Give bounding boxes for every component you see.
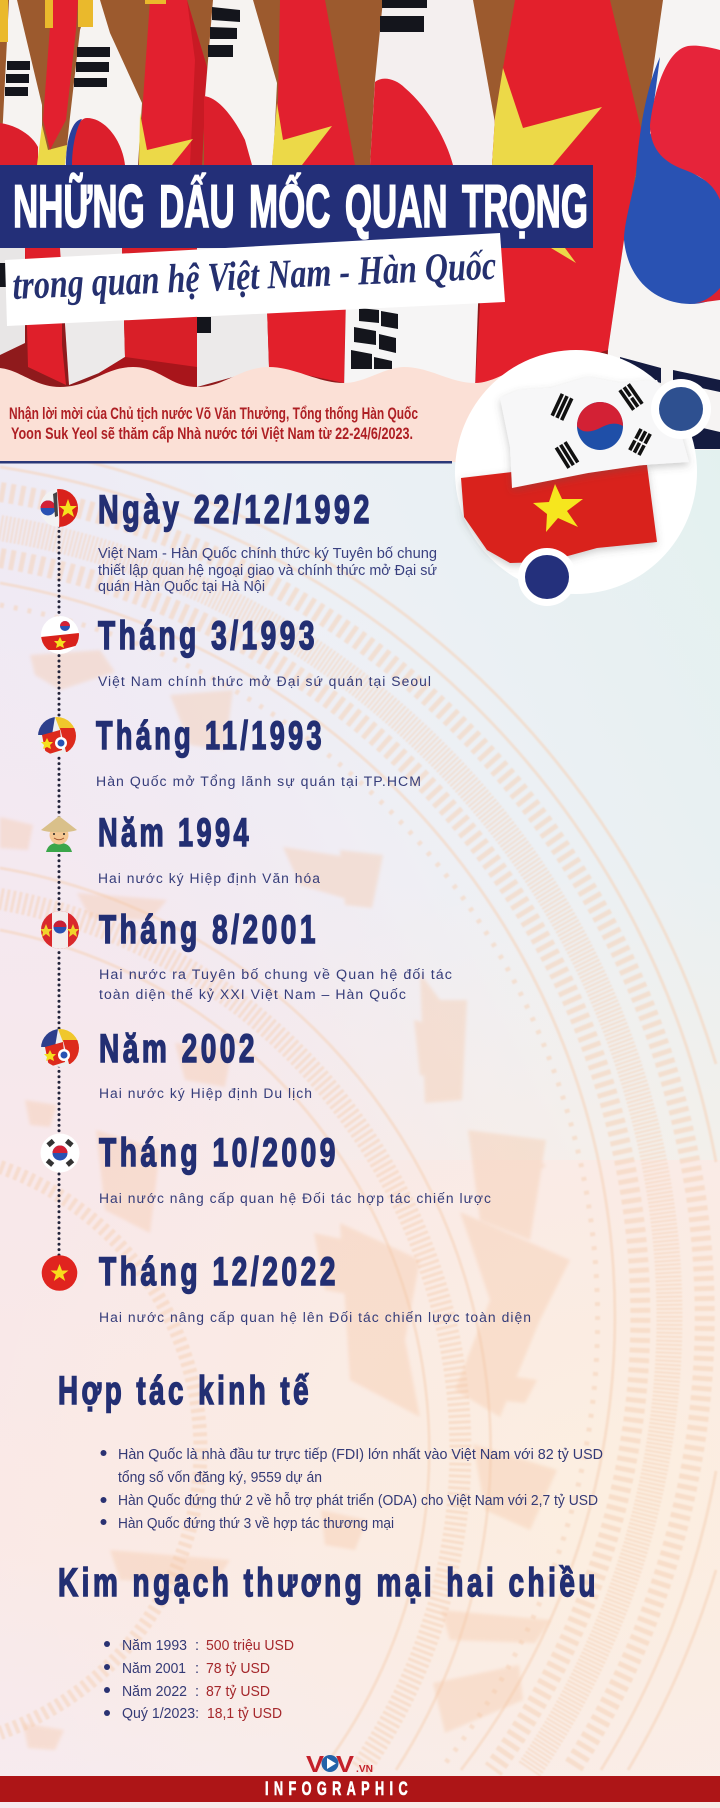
hero photo: flags <box>0 0 720 450</box>
page background with bronze drum pattern <box>0 440 720 1808</box>
trade figures list: 500 triệu USD <box>206 1638 294 1654</box>
trade figures list: Năm 1993 <box>122 1638 187 1654</box>
title banner <box>0 165 593 248</box>
milestone: 2002 <box>41 1027 313 1101</box>
milestone: 10/2009: Hai nước nâng cấp quan hệ Đối tác hợp tác chiến lược <box>99 1191 492 1206</box>
icon: Korea and Vietnam flags in white circle <box>455 350 711 606</box>
bullet list: Hàn Quốc đứng thứ 2 về hỗ trợ phát triển (ODA) cho Việt Nam với 2,7 tỷ USD <box>118 1492 598 1509</box>
milestone: 22/12/1992: Việt Nam - Hàn Quốc chính thức ký Tuyên bố chung <box>98 546 437 562</box>
logo: VOV.VN: V <box>336 1751 355 1777</box>
milestone: 10/2009 <box>40 1131 492 1206</box>
milestone: 10/2009: Tháng 10/2009 <box>99 1131 339 1175</box>
section: two-way trade turnover <box>58 1561 599 1722</box>
icon: mixed flags <box>38 717 76 755</box>
footer bar <box>0 1776 720 1802</box>
flag column A <box>0 0 78 165</box>
bullet list: Hàn Quốc là nhà đầu tư trực tiếp (FDI) lớn nhất vào Việt Nam với 82 tỷ USD <box>118 1447 603 1463</box>
flag column B <box>65 0 207 165</box>
trade figures list: Năm 2022 <box>122 1684 187 1700</box>
bullet list: tổng số vốn đăng ký, 9559 dự án <box>118 1470 322 1486</box>
milestone: 8/2001: toàn diện thế kỷ XXI Việt Nam – Hàn Quốc <box>99 987 407 1002</box>
milestone: 8/2001: Hai nước ra Tuyên bố chung về Quan hệ đối tác <box>99 967 453 982</box>
milestone: 12/2022: Tháng 12/2022 <box>99 1250 339 1294</box>
icon: Vietnam flag circle <box>42 1255 77 1291</box>
trade figures list: 87 tỷ USD <box>206 1684 270 1700</box>
milestone: 12/2022: Hai nước nâng cấp quan hệ lên Đối tác chiến lược toàn diện <box>99 1310 532 1325</box>
trade figures list: : <box>195 1638 199 1654</box>
milestone: 3/1993: Việt Nam chính thức mở Đại sứ quán tại Seoul <box>98 674 432 689</box>
flag column E with large taegeuk <box>604 0 720 450</box>
milestone: 1994: Hai nước ký Hiệp định Văn hóa <box>98 871 321 886</box>
panel: invitation intro: Nhận lời mời của Chủ tịch nước Võ Văn Thưởng, Tổng thống Hàn Quốc <box>9 405 418 423</box>
section: economic cooperation <box>58 1369 603 1532</box>
icon: crossed flags <box>40 911 79 949</box>
milestone: 12/2022 <box>42 1250 532 1325</box>
milestone: 3/1993 <box>41 614 432 689</box>
milestone: 2002: Năm 2002 <box>99 1027 258 1071</box>
subtitle white strip: trong quan hệ Việt Nam - Hàn Quốc <box>11 242 497 308</box>
lower flag columns <box>0 165 637 395</box>
panel: invitation intro <box>0 367 514 464</box>
flag column D <box>370 0 642 165</box>
icon: Korea flag circle <box>40 1134 80 1172</box>
milestone: 2002: Hai nước ký Hiệp định Du lịch <box>99 1086 313 1101</box>
milestone: 22/12/1992: thiết lập quan hệ ngoại giao và chính thức mở Đại sứ <box>98 563 437 579</box>
icon: Korea and Vietnam waving flags <box>41 616 79 654</box>
bullet list <box>100 1447 603 1532</box>
milestone: 8/2001 <box>40 908 453 1002</box>
icon: person with conical hat <box>41 816 77 852</box>
milestone: 1994: Năm 1994 <box>98 811 252 855</box>
milestone: 8/2001: Tháng 8/2001 <box>99 908 319 952</box>
milestone: 22/12/1992: quán Hàn Quốc tại Hà Nội <box>98 579 265 595</box>
logo: VOV.VN: V <box>306 1751 325 1777</box>
panel: invitation intro: Yoon Suk Yeol sẽ thăm cấp Nhà nước tới Việt Nam từ 22-24/6/2023. <box>11 425 413 443</box>
trade figures list: Năm 2001 <box>122 1661 186 1677</box>
logo: VOV.VN <box>306 1751 373 1777</box>
milestone: 11/1993: Tháng 11/1993 <box>96 714 325 758</box>
trade figures list: : <box>195 1661 199 1677</box>
logo: VOV.VN: .VN <box>356 1763 373 1775</box>
milestone: 11/1993: Hàn Quốc mở Tổng lãnh sự quán tại TP.HCM <box>96 774 422 789</box>
milestone: 3/1993: Tháng 3/1993 <box>98 614 318 658</box>
trade figures list: : <box>195 1684 199 1700</box>
milestone: 22/12/1992 <box>40 488 437 595</box>
icon: half Korea half Vietnam flag <box>40 489 78 527</box>
trade figures list: 78 tỷ USD <box>206 1661 270 1677</box>
milestone: 22/12/1992: Ngày 22/12/1992 <box>98 488 373 532</box>
trade figures list: 18,1 tỷ USD <box>207 1706 282 1722</box>
subtitle white strip <box>5 233 505 326</box>
footer bar: INFOGRAPHIC <box>265 1779 413 1800</box>
icon: mixed flags <box>41 1029 79 1067</box>
trade figures list: Quý 1/2023: <box>122 1706 199 1722</box>
bullet list: Hàn Quốc đứng thứ 3 về hợp tác thương mại <box>118 1516 394 1532</box>
flag column C <box>204 0 355 165</box>
milestone: 1994 <box>41 811 321 886</box>
timeline dotted line <box>58 526 60 1256</box>
heading: Hợp tác kinh tế <box>58 1369 312 1413</box>
milestone: 11/1993 <box>38 714 422 789</box>
trade figures list <box>104 1638 294 1722</box>
